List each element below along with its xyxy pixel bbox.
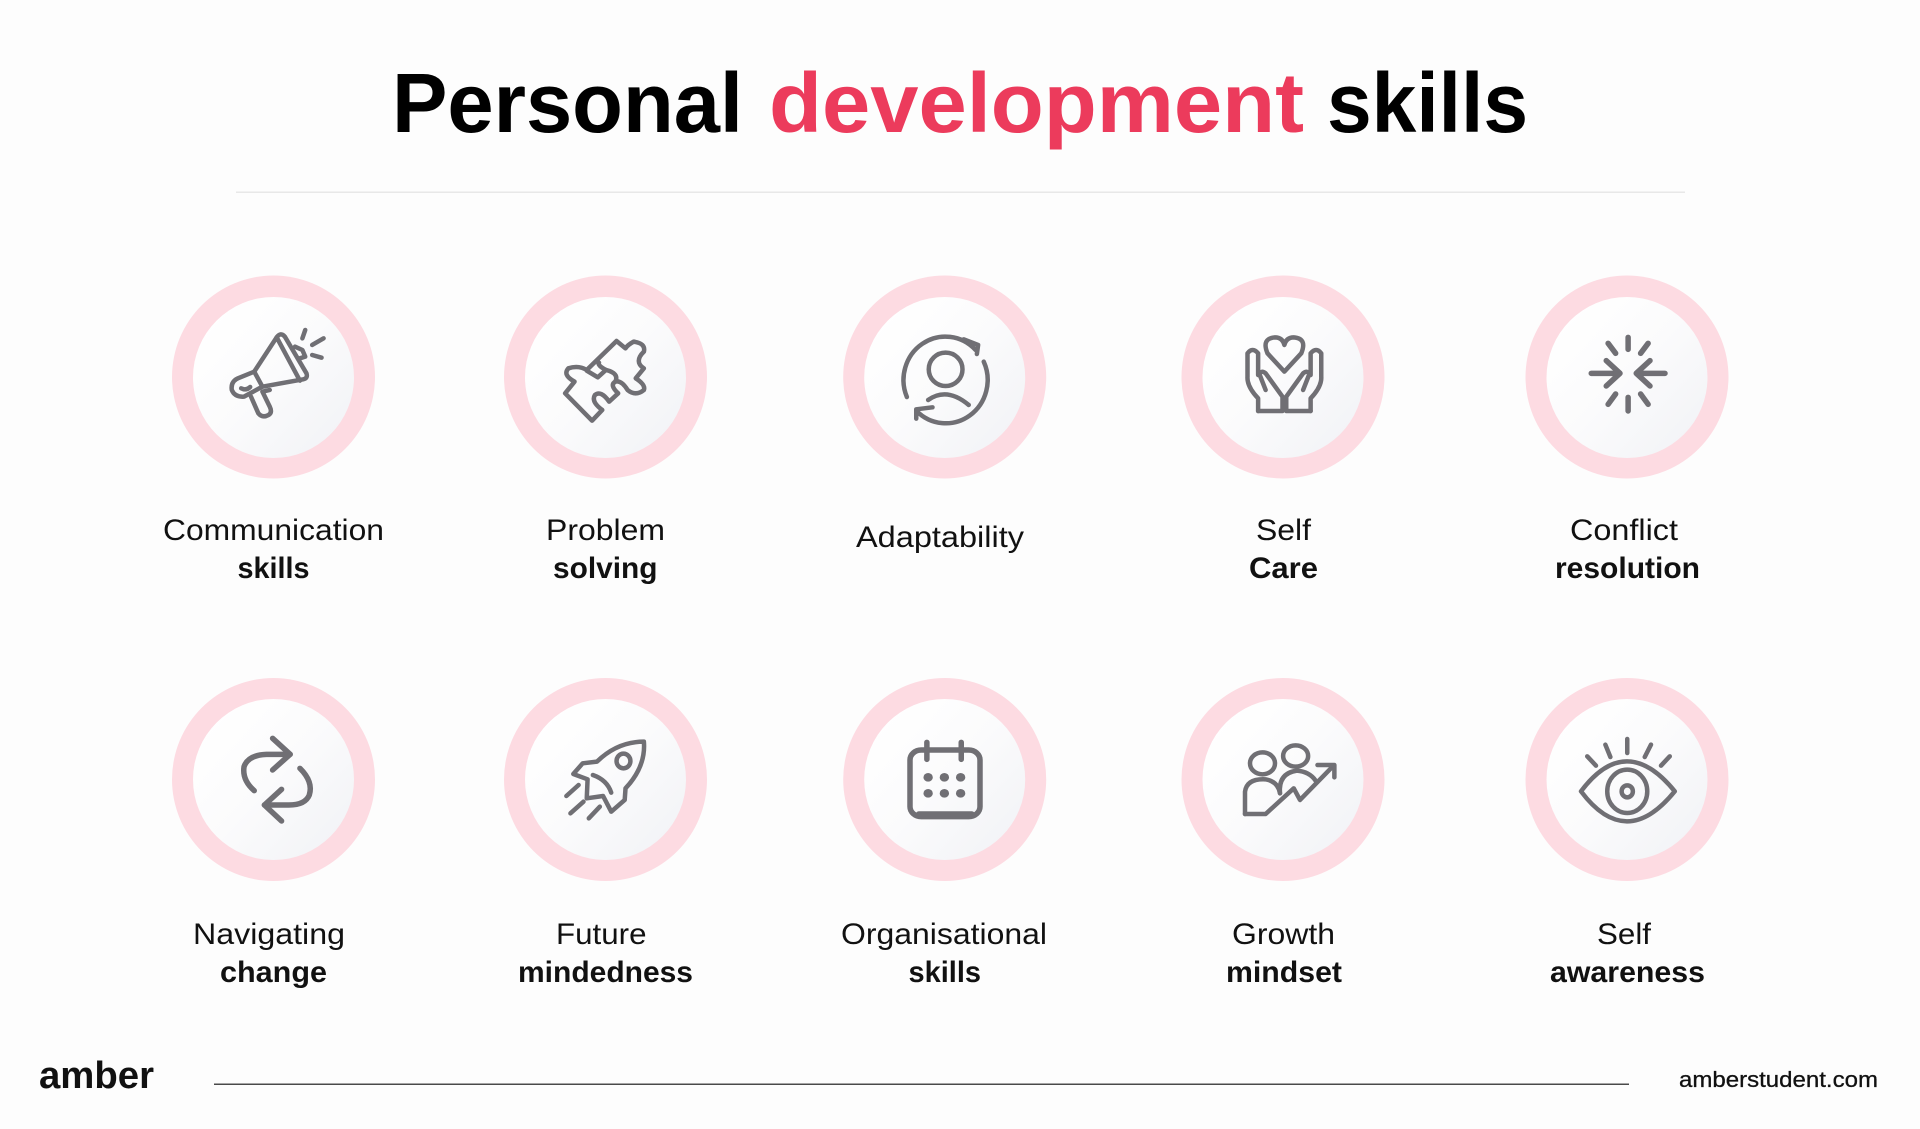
icon: people with rising arrow — [1245, 745, 1334, 814]
skill: problem solving — [504, 276, 707, 585]
label: organisational skills: skills — [908, 956, 981, 989]
title: development — [769, 56, 1304, 150]
icon: repeat arrows — [244, 738, 310, 821]
label: conflict resolution — [1555, 514, 1700, 585]
icon: eye — [1581, 739, 1675, 821]
skill: future mindedness — [504, 678, 707, 989]
label: growth mindset — [1226, 918, 1342, 989]
label: conflict resolution: resolution — [1555, 552, 1700, 585]
label: self awareness: awareness — [1550, 956, 1705, 989]
label: conflict resolution: Conflict — [1570, 514, 1679, 547]
label: future mindedness: mindedness — [518, 956, 693, 989]
label: organisational skills: Organisational — [841, 918, 1047, 951]
label: organisational skills — [841, 918, 1047, 989]
icon: hands holding heart — [1247, 337, 1321, 411]
title: Personal — [392, 56, 743, 150]
label: communication skills — [163, 514, 384, 585]
label: self care: Self — [1256, 514, 1312, 547]
label: problem solving: Problem — [546, 514, 665, 547]
label: self care — [1249, 514, 1318, 585]
label: self awareness — [1550, 918, 1705, 989]
website url: amberstudent.com — [1679, 1067, 1878, 1092]
icon: person with rotating arrows — [904, 337, 988, 423]
label: problem solving: solving — [553, 552, 658, 585]
label: navigating change: Navigating — [193, 918, 345, 951]
title: skills — [1327, 56, 1528, 150]
icon: converging arrows — [1591, 337, 1665, 411]
label: future mindedness: Future — [556, 918, 646, 951]
label: communication skills: skills — [238, 552, 310, 585]
icon: megaphone — [232, 330, 324, 416]
icon: rocket — [566, 742, 644, 818]
skill: self awareness — [1526, 678, 1728, 989]
skill: organisational skills — [841, 678, 1047, 989]
label: navigating change — [193, 918, 345, 989]
skill: self care — [1182, 276, 1384, 585]
label: adaptability: Adaptability — [856, 521, 1024, 554]
skill: adaptability — [843, 276, 1046, 554]
label: self awareness: Self — [1597, 918, 1652, 951]
label: self care: Care — [1249, 552, 1318, 585]
icon: puzzle pieces — [565, 341, 644, 421]
skill: navigating change — [172, 678, 375, 989]
icon: calendar — [910, 742, 980, 817]
label: communication skills: Communication — [163, 514, 384, 547]
label: navigating change: change — [220, 956, 327, 989]
label: growth mindset: mindset — [1226, 956, 1342, 989]
label: future mindedness — [518, 918, 693, 989]
skill: growth mindset — [1182, 678, 1384, 989]
skill: communication skills — [163, 276, 384, 585]
logo: amber: amber — [39, 1055, 154, 1097]
label: growth mindset: Growth — [1232, 918, 1335, 951]
label: problem solving — [546, 514, 665, 585]
skill: conflict resolution — [1526, 276, 1728, 585]
